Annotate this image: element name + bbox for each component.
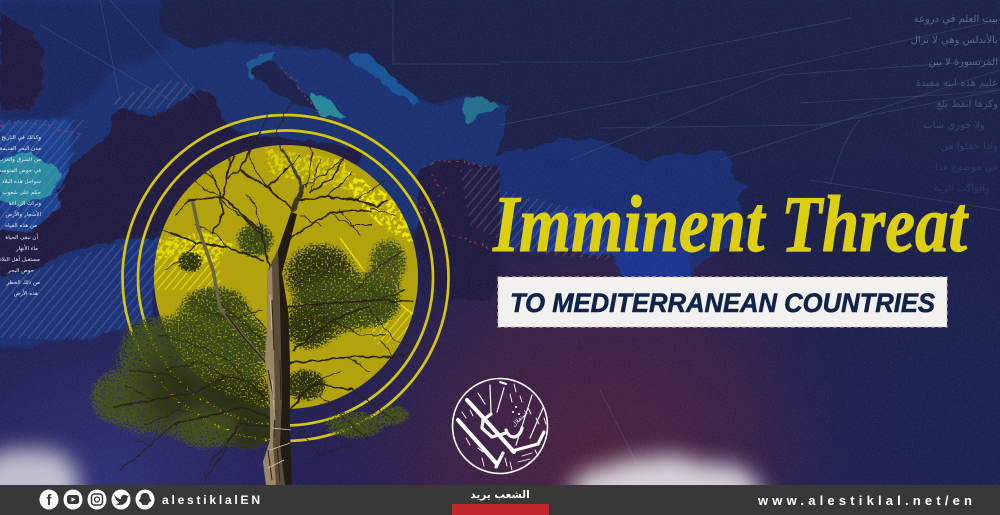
arabic text: left column: حوض البحر: [7, 268, 34, 274]
arabic text: top right, faint: في موضوع هذا: [935, 162, 998, 173]
tree trunk: [263, 212, 297, 485]
arabic text: left column: مستقبل أهل البلاد: [0, 255, 40, 263]
subtitle strip: TO MEDITERRANEAN COUNTRIES: [510, 288, 935, 318]
map: teal shallows: [0, 50, 500, 205]
arabic text: left column: سواحل هذه البلاد: [2, 179, 41, 185]
social icons: f: [46, 492, 52, 509]
clouds: [0, 433, 776, 485]
arabic text: top right, faint: عليم هذه ابنة مفيدة: [916, 78, 998, 89]
footer bar: [0, 485, 1000, 515]
arabic text: left column: مدن البحر القديمة: [0, 146, 41, 152]
yellow sun disc: [150, 145, 420, 409]
arabic text: top right, faint: بالأندلس وهي لا تزال: [911, 33, 998, 46]
logo: calligraphy roundel: [452, 378, 548, 474]
tree: [81, 90, 417, 485]
red tab: [452, 504, 549, 515]
arabic text: left column: وتراث الزراعة: [9, 201, 41, 207]
website: www.alestiklal.net/en: [757, 493, 972, 508]
arabic text: top right, faint: المرتسورة لا بين: [928, 57, 998, 68]
map: red coastlines: [0, 68, 490, 245]
arabic text: left column: من ذلك الخطر: [5, 280, 40, 286]
arabic text: top right, faint: بيت العلم في دروعة: [914, 14, 998, 25]
arabic text: left column: الأشجار والأرض: [5, 210, 41, 218]
arabic text: top right, faint: ولا خوري شاب: [923, 120, 985, 131]
slogan: الشعب يريد: [470, 489, 530, 501]
arabic text: top right, faint: والواكب الرية: [934, 183, 990, 194]
concentric rings: [122, 115, 448, 441]
map: diagonal hatching: [0, 80, 610, 340]
handle: alestiklalEN: [162, 493, 260, 507]
tree foliage: [81, 216, 417, 458]
tree branches: [115, 90, 413, 480]
arabic text: left column: أن تبقى الحياة: [5, 233, 38, 241]
arabic text: left column: [0, 134, 41, 297]
arabic text: top right, faint: وكرها انقط بلغ: [937, 99, 998, 110]
arabic text: left column: هذه الأرض: [14, 289, 38, 297]
arabic text: left column: حكم على شعوب: [2, 189, 41, 196]
logo wordmark: استقلال: [511, 409, 530, 428]
social icons: [40, 490, 154, 510]
map: blue sea regions: [0, 0, 748, 350]
map: dark land masses: [0, 0, 1000, 300]
arabic text: top right, faint: [911, 14, 998, 194]
arabic text: left column: ماء الأنهار: [15, 244, 38, 252]
arabic text: left column: من هذه المياه: [5, 223, 37, 229]
left limb: [193, 203, 268, 365]
subtitle strip: [498, 277, 947, 327]
arabic text: top right, faint: واذا جملوا من: [941, 141, 998, 152]
arabic text: left column: وكذلك في التاريخ: [2, 134, 41, 141]
